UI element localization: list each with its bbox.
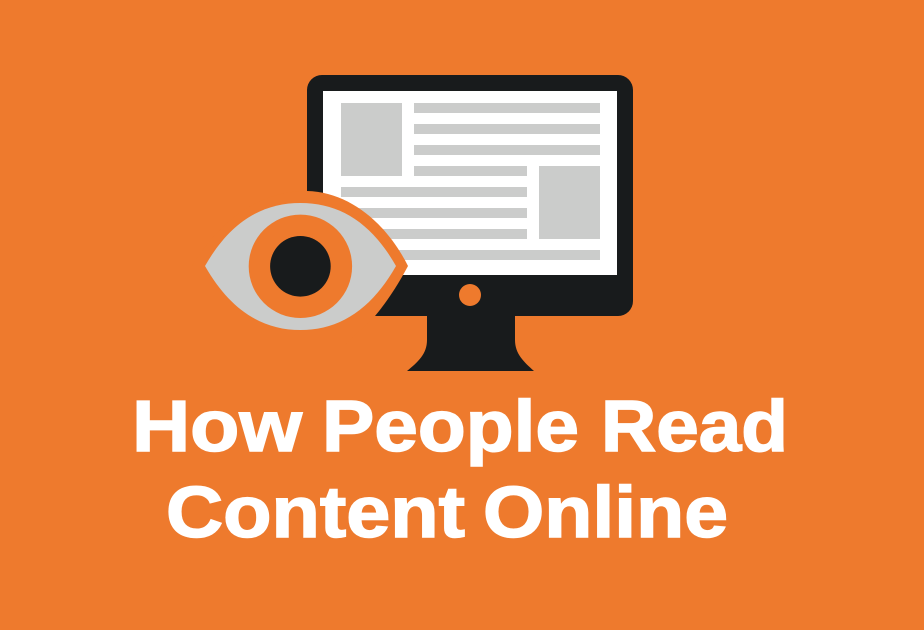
title: People	[322, 387, 579, 467]
icon: eye	[192, 191, 408, 345]
title: Online	[483, 473, 728, 553]
icon: computer monitor	[307, 75, 633, 371]
title: How	[132, 387, 303, 467]
title	[132, 387, 788, 553]
title: Read	[601, 387, 788, 467]
article layout on screen	[341, 103, 600, 260]
title: Content	[166, 473, 465, 553]
